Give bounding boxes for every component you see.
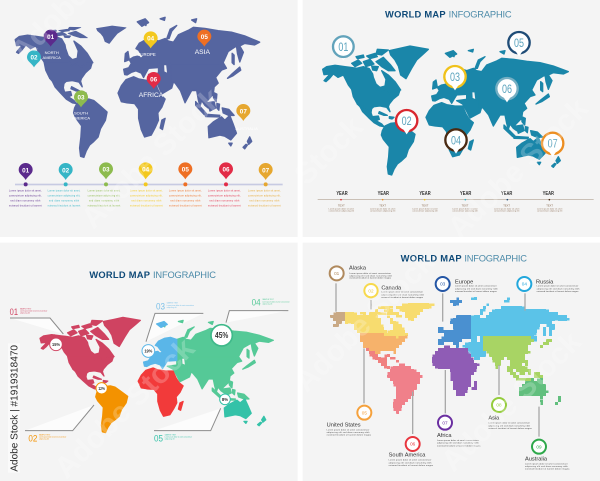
location markers: 02 [402, 114, 412, 128]
map pins and region names: EUROPE [138, 52, 156, 57]
region descriptions: adipiscing elit sed diam nonummy nibh [381, 293, 425, 296]
region labels: Europe [455, 280, 473, 286]
callout labels: SAMPLE TEXT [165, 433, 176, 436]
location markers: 01 [338, 40, 349, 54]
region descriptions: adipiscing elit sed diam nonummy nibh [537, 287, 580, 290]
timeline: euismod tincidunt ut laoreet [248, 204, 281, 207]
title: INFOGRAPHIC [449, 10, 512, 20]
region descriptions: euismod tincidunt ut laoreet dolore magna [437, 444, 481, 447]
timeline: euismod tincidunt ut laoreet [48, 204, 81, 207]
stock watermark: Adobe Stock [442, 92, 595, 245]
year timeline: YEAR [543, 191, 554, 197]
year timeline: YEAR [336, 191, 348, 197]
map pins and region names: AFRICA [139, 92, 164, 99]
timeline: consectetuer adipiscing elit, [248, 195, 281, 198]
stock watermark: Adobe Stock [435, 325, 588, 478]
timeline: sed diam nonummy nibh [49, 201, 80, 203]
map pins and region names: 06 [150, 76, 158, 83]
region labels: United States [327, 422, 361, 428]
title: INFOGRAPHIC [464, 254, 527, 264]
region descriptions: euismod tincidunt ut laoreet dolore magna [349, 277, 392, 280]
title: INFOGRAPHIC [153, 270, 216, 280]
percentage badges: 45% [215, 331, 228, 340]
region descriptions: euismod tincidunt ut laoreet dolore magna [537, 290, 579, 293]
region descriptions: euismod tincidunt ut laoreet dolore magna [455, 290, 497, 293]
region descriptions: adipiscing elit sed diam nonummy nibh [525, 465, 568, 468]
callout labels: adipiscing elit [39, 438, 49, 441]
callout labels: adipiscing elit [20, 312, 30, 315]
region labels: Asia [488, 416, 500, 422]
region markers: 06 [410, 442, 416, 447]
region descriptions: Lorem ipsum dolor sit amet consectetuer [437, 439, 479, 442]
timeline: sed diam nonummy nibh [10, 201, 41, 203]
panel: pixel world map [303, 243, 600, 481]
region labels: Alaska [349, 266, 367, 272]
timeline: sed diam nonummy nibh [170, 201, 201, 203]
timeline: Lorem ipsum dolor sit amet, [48, 190, 81, 193]
callout labels: Lorem ipsum dolor sit amet consectetuer [165, 436, 192, 439]
timeline: 07 [262, 167, 270, 174]
percentage badges: 8% [222, 397, 228, 402]
year timeline [318, 191, 594, 213]
region markers: 08 [496, 403, 502, 408]
percentage badges [50, 325, 232, 405]
timeline: Lorem ipsum dolor sit amet, [88, 190, 121, 193]
panel: percentage world map [0, 243, 298, 481]
timeline: Lorem ipsum dolor sit amet, [169, 190, 202, 193]
callout leader lines [10, 311, 288, 431]
map pins and region names: SOUTH [74, 110, 88, 115]
year timeline: TEXT [422, 204, 429, 208]
callout labels: Lorem ipsum dolor sit amet consectetuer [20, 310, 48, 313]
year timeline: Lorem ipsum dolor sit amet [494, 208, 520, 211]
timeline: consectetuer adipiscing elit, [88, 195, 121, 198]
year timeline: Lorem ipsum dolor sit amet [370, 208, 396, 211]
timeline: euismod tincidunt ut laoreet [130, 204, 163, 207]
timeline: sed diam nonummy nibh [249, 201, 280, 203]
timeline: sed diam nonummy nibh [209, 201, 240, 203]
timeline: consectetuer adipiscing elit, [48, 195, 81, 198]
timeline: 06 [222, 167, 230, 174]
region labels: Canada [381, 286, 402, 292]
map pins and region names: AMERICA [72, 115, 90, 120]
region descriptions: euismod tincidunt ut laoreet dolore magna [389, 464, 434, 467]
timeline: Lorem ipsum dolor sit amet, [9, 190, 42, 193]
world map [323, 46, 568, 175]
location markers [333, 32, 563, 157]
timeline: consectetuer adipiscing elit, [169, 195, 202, 198]
world map [15, 17, 260, 157]
location markers: 04 [451, 133, 461, 147]
callout labels: SAMPLE TEXT [167, 302, 178, 305]
region descriptions: Lorem ipsum dolor sit amet consectetuer [349, 272, 391, 275]
timeline: euismod tincidunt ut laoreet [208, 204, 241, 207]
timeline: 01 [22, 167, 30, 174]
callout labels: SAMPLE TEXT [262, 298, 274, 301]
percentage badges: 19% [144, 349, 153, 354]
callout labels: Lorem ipsum dolor sit amet consectetuer [262, 300, 290, 303]
callout labels: SAMPLE TEXT [20, 307, 31, 310]
year timeline: consectetuer adipiscing elit [329, 210, 354, 213]
coloured world map [40, 317, 273, 433]
timeline: consectetuer adipiscing elit, [130, 195, 163, 198]
pixel world map [332, 298, 570, 413]
region descriptions: euismod tincidunt ut laoreet dolore magna [381, 296, 424, 299]
map pins and region names: 01 [47, 34, 55, 41]
map pins and region names: 02 [30, 55, 38, 62]
region markers: 09 [536, 444, 542, 449]
region labels: Australia [525, 456, 548, 462]
year timeline: TEXT [338, 204, 345, 208]
timeline: euismod tincidunt ut laoreet [169, 204, 202, 207]
callout labels: 05 [154, 434, 163, 444]
year timeline: consectetuer adipiscing elit [494, 210, 520, 213]
map pins and region names: ASIA [195, 49, 210, 56]
region markers: 02 [368, 288, 374, 293]
year timeline: TEXT [546, 204, 553, 208]
region descriptions: Lorem ipsum dolor sit amet consectetuer [381, 291, 423, 294]
year timeline: YEAR [419, 191, 431, 197]
region labels: South America [389, 453, 426, 459]
region markers: 01 [334, 271, 340, 276]
region descriptions: Lorem ipsum dolor sit amet consectetuer [389, 459, 432, 462]
stock id caption: Adobe Stock | #1919318470 [10, 345, 21, 472]
year timeline: Lorem ipsum dolor sit amet [329, 208, 354, 211]
region descriptions: Lorem ipsum dolor sit amet consectetuer [537, 285, 579, 288]
region markers: 07 [442, 420, 448, 425]
timeline: 03 [102, 167, 110, 174]
panel: pin world map [0, 0, 298, 237]
callout labels: 04 [252, 298, 261, 308]
callout labels: 03 [156, 301, 165, 311]
map pins and region names: 04 [147, 36, 155, 43]
year timeline: TEXT [379, 204, 386, 208]
region markers [330, 266, 546, 454]
callout labels: Lorem ipsum dolor sit amet consectetuer [167, 304, 194, 307]
stock watermark: Adobe Stock [48, 332, 201, 481]
region markers: 04 [522, 282, 527, 287]
region descriptions: euismod tincidunt ut laoreet dolore magna [488, 427, 532, 430]
region labels [327, 266, 554, 462]
location markers: 03 [450, 70, 460, 84]
timeline: euismod tincidunt ut laoreet [9, 204, 42, 207]
region descriptions: adipiscing elit sed diam nonummy nibh [437, 442, 479, 445]
timeline: Lorem ipsum dolor sit amet, [208, 190, 241, 193]
panel: year timeline world map [303, 0, 600, 237]
map pins and region names: 03 [77, 95, 85, 102]
region labels: Africa [437, 433, 452, 439]
region labels: Russia [536, 280, 554, 286]
year timeline: YEAR [501, 191, 512, 197]
title: WORLD MAP [401, 254, 462, 264]
region descriptions: Lorem ipsum dolor sit amet consectetuer [327, 428, 370, 431]
stock watermark: Stock [288, 110, 370, 192]
callout labels: adipiscing elit [262, 302, 273, 305]
title: WORLD MAP [385, 10, 446, 20]
timeline: euismod tincidunt ut laoreet [88, 204, 121, 207]
year timeline: consectetuer adipiscing elit [452, 210, 478, 213]
year timeline: Lorem ipsum dolor sit amet [452, 208, 478, 211]
region descriptions: adipiscing elit sed diam nonummy nibh [389, 461, 432, 464]
year timeline: YEAR [460, 191, 471, 197]
map pins and region names [27, 30, 258, 131]
location markers: 06 [502, 82, 512, 96]
year timeline: TEXT [462, 204, 469, 208]
map pins and region names: 07 [240, 108, 247, 115]
percentage badges: 15% [52, 342, 61, 347]
timeline: Lorem ipsum dolor sit amet, [248, 190, 281, 193]
year timeline: consectetuer adipiscing elit [537, 210, 563, 213]
year timeline: Lorem ipsum dolor sit amet [412, 208, 438, 211]
callout labels: adipiscing elit [167, 306, 177, 309]
callout labels [10, 298, 290, 444]
region descriptions: adipiscing elit sed diam nonummy nibh [349, 274, 393, 277]
callout labels: 02 [28, 434, 37, 444]
stock watermark: Adobe Stock [288, 245, 441, 398]
timeline: sed diam nonummy nibh [89, 201, 120, 203]
region descriptions: Lorem ipsum dolor sit amet consectetuer [488, 422, 530, 425]
year timeline: consectetuer adipiscing elit [412, 210, 438, 213]
timeline: 05 [182, 167, 189, 174]
timeline: Lorem ipsum dolor sit amet, [130, 190, 163, 193]
year timeline: Lorem ipsum dolor sit amet [537, 208, 563, 211]
region descriptions: euismod tincidunt ut laoreet dolore magna [327, 434, 372, 437]
region descriptions: adipiscing elit sed diam nonummy nibh [488, 424, 531, 427]
region descriptions: adipiscing elit sed diam nonummy nibh [327, 431, 370, 434]
region descriptions: adipiscing elit sed diam nonummy nibh [455, 287, 498, 290]
timeline: consectetuer adipiscing elit, [208, 195, 241, 198]
callout wedges [10, 311, 288, 431]
region descriptions: Lorem ipsum dolor sit amet consectetuer [525, 462, 568, 465]
connector stems [336, 283, 539, 437]
region descriptions: euismod tincidunt ut laoreet dolore magna [525, 468, 570, 471]
year timeline: YEAR [378, 191, 389, 197]
percentage badges: 12% [98, 386, 105, 391]
callout labels: SAMPLE TEXT [39, 433, 50, 436]
map pins and region names: AMERICA [43, 55, 61, 60]
region markers: 03 [440, 282, 446, 287]
map pins and region names: NORTH [45, 50, 59, 55]
timeline: consectetuer adipiscing elit, [9, 195, 42, 198]
callout labels: Lorem ipsum dolor sit amet consectetuer [39, 436, 67, 439]
year timeline: consectetuer adipiscing elit [370, 210, 396, 213]
timeline: 02 [62, 167, 70, 174]
location markers: 07 [548, 137, 558, 151]
map pins and region names: 05 [201, 34, 208, 41]
location markers: 05 [514, 36, 524, 50]
callout labels: adipiscing elit [165, 438, 175, 441]
stock watermark: Adobe Stock [75, 82, 228, 235]
region descriptions: Lorem ipsum dolor sit amet consectetuer [455, 285, 497, 288]
map pins and region names: AUSTRALIA [236, 126, 258, 131]
region markers: 05 [362, 410, 367, 415]
year timeline: TEXT [503, 204, 510, 208]
timeline [9, 162, 283, 207]
timeline: sed diam nonummy nibh [131, 201, 162, 203]
timeline: 04 [142, 167, 150, 174]
region descriptions [327, 272, 580, 471]
callout labels: 01 [10, 307, 18, 317]
title: WORLD MAP [89, 270, 150, 280]
